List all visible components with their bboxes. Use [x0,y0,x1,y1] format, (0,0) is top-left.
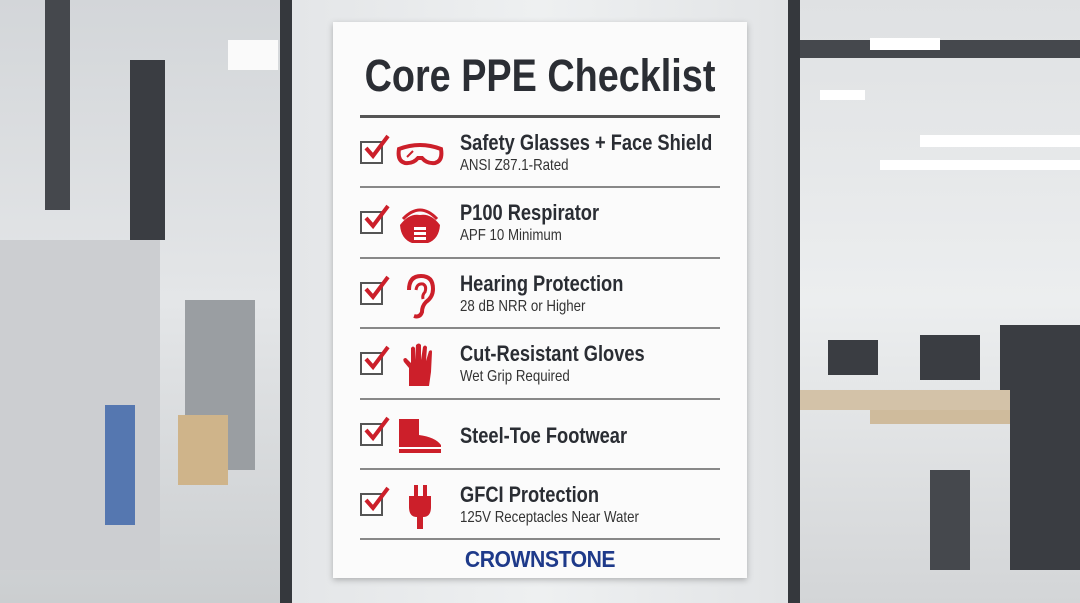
logo: CROWNSTONE [465,546,615,572]
row: safety glasses: Safety Glasses + Face Shield [460,130,712,155]
title: Core PPE Checklist [365,50,715,101]
row: gloves: Wet Grip Required [460,368,570,385]
pillar frame [280,0,800,603]
row: safety glasses [360,130,712,174]
background: right office area [800,0,1080,603]
row: safety glasses: ANSI Z87.1-Rated [460,157,569,174]
row: GFCI [360,482,639,529]
icon: respirator [400,208,440,243]
row: hearing: 28 dB NRR or Higher [460,298,585,315]
row: hearing: Hearing Protection [460,271,623,296]
row: footwear [360,416,627,453]
row: GFCI: 125V Receptacles Near Water [460,509,639,526]
row: respirator: P100 Respirator [460,200,599,225]
icon: plug [409,485,431,529]
row: footwear: Steel-Toe Footwear [460,423,627,448]
row: respirator: APF 10 Minimum [460,227,562,244]
sign card [333,22,747,578]
row: GFCI: GFCI Protection [460,482,599,507]
row: gloves [360,341,645,386]
icon: check [364,134,390,160]
row: gloves: Cut-Resistant Gloves [460,341,645,366]
row: hearing [360,271,623,318]
icon: boot [399,419,441,453]
icon: glove [403,344,432,386]
row: respirator [360,200,599,244]
background: left office area [0,0,280,603]
icon: goggles [396,143,444,166]
icon: ear [407,274,435,318]
